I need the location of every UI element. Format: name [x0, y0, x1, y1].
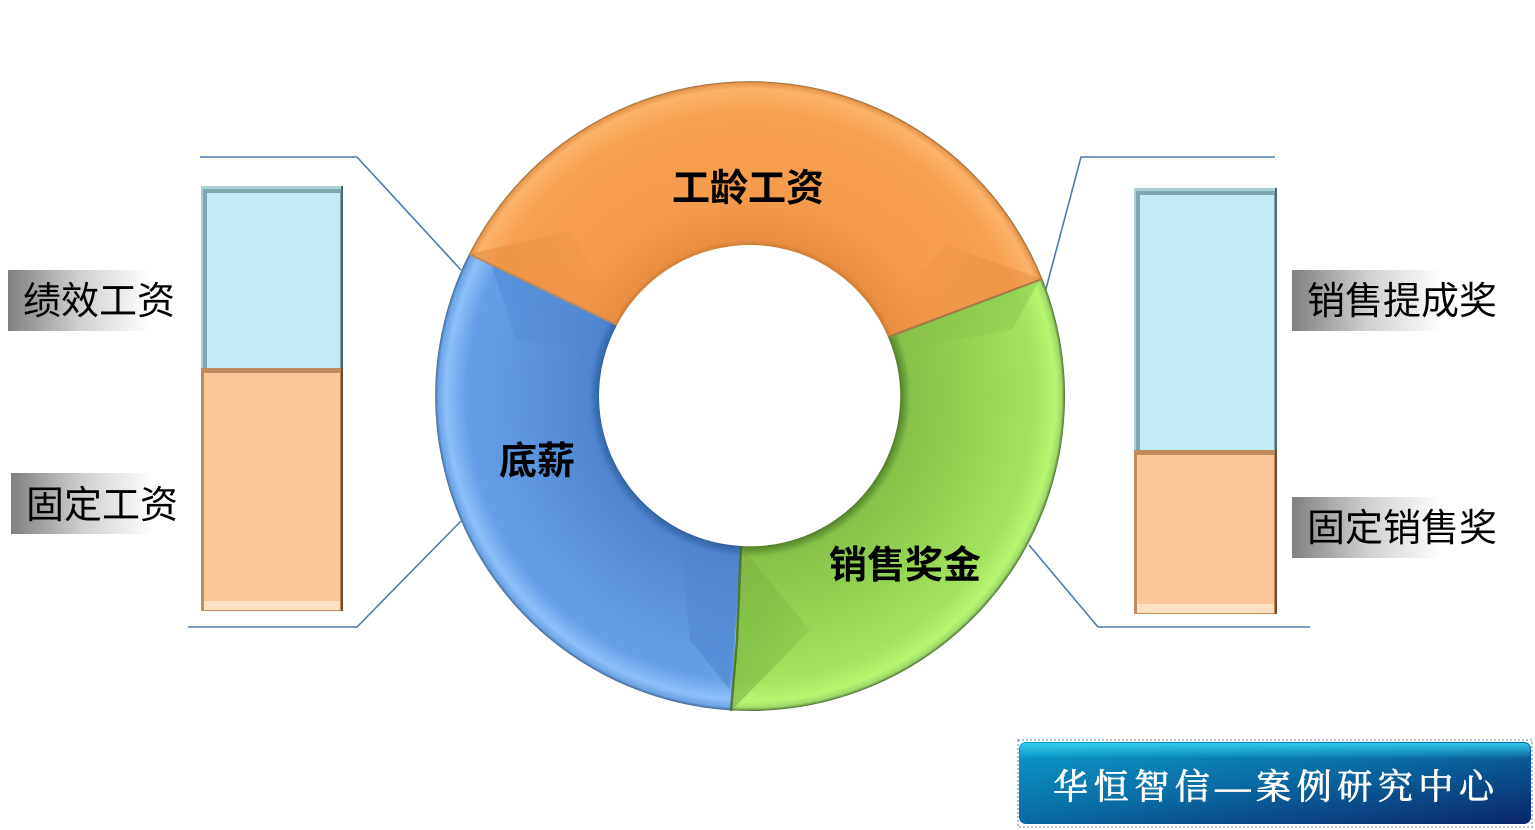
label: 工龄工资: 工龄工资	[672, 168, 824, 210]
donut chart	[435, 81, 1065, 711]
right stacked bar	[1134, 188, 1277, 614]
banner: 华恒智信—案例研究中心: 华恒智信—案例研究中心	[1053, 768, 1500, 807]
label: 销售奖金: 销售奖金	[829, 545, 981, 587]
label: 固定销售奖: 固定销售奖	[1307, 508, 1497, 550]
label: 底薪: 底薪	[499, 441, 575, 483]
banner: 华恒智信—案例研究中心	[1018, 740, 1532, 827]
segment: 工龄工资	[469, 81, 1042, 337]
bar part: 绩效工资	[201, 186, 343, 369]
connector lines	[188, 157, 1310, 627]
bar part: 销售提成奖	[1134, 188, 1277, 451]
left stacked bar	[201, 186, 343, 611]
segment: 销售奖金	[731, 279, 1065, 711]
label: 销售提成奖	[1292, 270, 1497, 331]
label: 固定工资	[11, 473, 178, 534]
label: 固定工资: 固定工资	[26, 485, 178, 527]
bar part: 固定工资	[201, 368, 343, 611]
label: 绩效工资	[8, 270, 175, 331]
segment: 底薪	[435, 254, 741, 710]
label: 固定销售奖	[1292, 497, 1497, 558]
label: 销售提成奖: 销售提成奖	[1307, 281, 1497, 323]
label: 绩效工资: 绩效工资	[23, 281, 175, 323]
bar part: 固定销售奖	[1134, 450, 1277, 614]
